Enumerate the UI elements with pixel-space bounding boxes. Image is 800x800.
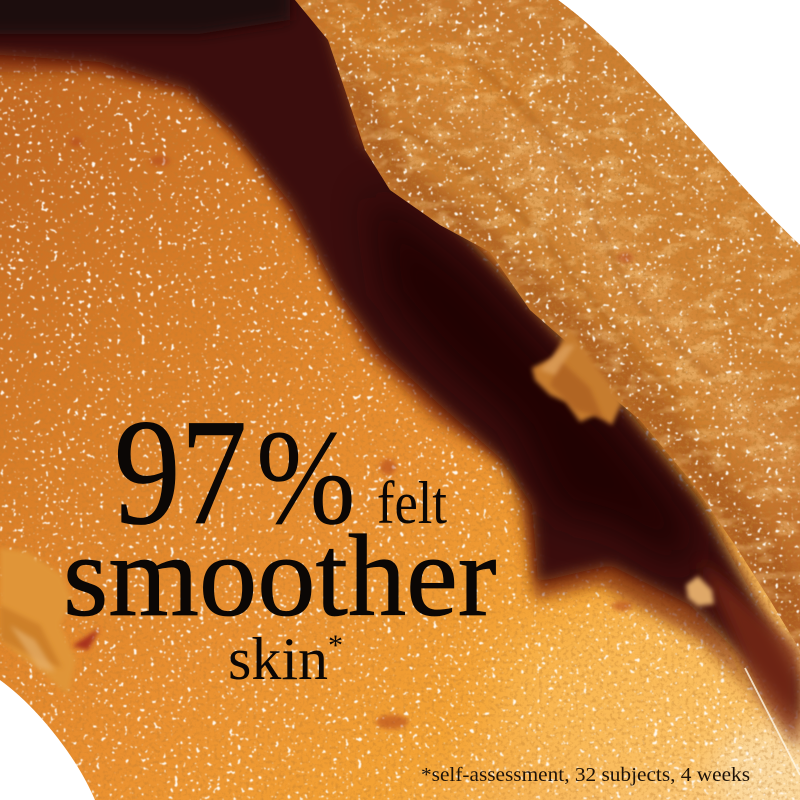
ridge grain [298,0,800,643]
headline [63,388,497,692]
hanging scrub lump [532,328,622,425]
bright band on the fold [420,60,800,480]
sparkle highlights on ridge [298,0,800,647]
percent sign: % [256,402,356,553]
small dark flecks [70,137,633,729]
footnote: *self-assessment, 32 subjects, 4 weeks [421,764,750,786]
warm glow lower right [490,600,790,780]
product ridge: upper right textured fold [295,0,800,650]
smoother: smoother [63,512,497,641]
fold creases [400,60,720,400]
pale glow bottom right corner [715,725,800,800]
skin: * [328,629,343,662]
big number: 97 [114,388,247,556]
lower right edge shadow [700,560,800,750]
highlight details bottom right [686,576,800,775]
golden scrub lump lower left [0,548,100,695]
skin: skin [228,626,328,692]
dark lower lip of the fold [328,40,800,650]
lump texture [300,0,800,650]
highlight streak [745,668,800,775]
orange crest [330,10,540,100]
deep shadow core [370,190,690,575]
top dark band [0,0,290,34]
felt: felt [377,471,447,537]
granule near right shadow [686,576,714,606]
